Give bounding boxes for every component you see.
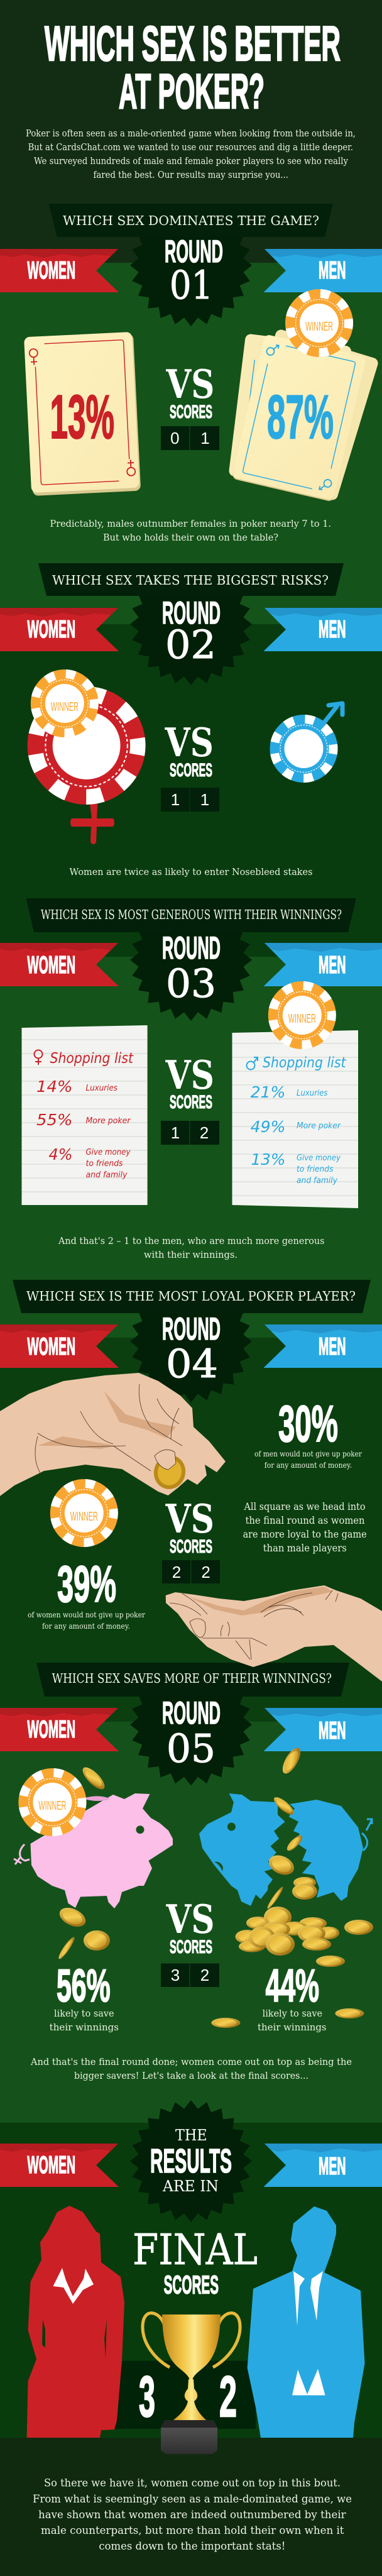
round 3 badge: 03 bbox=[166, 960, 216, 1006]
round 3 men banner bbox=[264, 943, 382, 986]
men shopping list: 49% bbox=[251, 1118, 285, 1136]
closing text: male counterparts, but more than hold their own when it bbox=[41, 2524, 344, 2536]
men stat 44%: 44% bbox=[266, 1961, 319, 2012]
women shopping list: and family bbox=[85, 1170, 128, 1180]
women stat 56%: their winnings bbox=[50, 2023, 119, 2033]
trophy bbox=[143, 2313, 240, 2454]
winner chip round 1: WINNER bbox=[305, 320, 333, 334]
intro text: fared the best. Our results may surprise you... bbox=[93, 170, 288, 180]
round 4 badge: 04 bbox=[166, 1341, 218, 1387]
women stat 39%: of women would not give up poker bbox=[28, 1610, 145, 1619]
round 4 commentary: the final round as women bbox=[245, 1515, 365, 1526]
men stat 30%: for any amount of money. bbox=[265, 1460, 352, 1470]
results women banner bbox=[0, 2144, 119, 2187]
women card 13% bbox=[24, 332, 141, 496]
winner chip round 2 bbox=[31, 669, 99, 737]
intro text: But at CardsChat.com we wanted to use our resources and dig a little deeper. bbox=[28, 143, 353, 153]
round 2 badge: 02 bbox=[165, 622, 216, 668]
round 3 women banner: WOMEN bbox=[27, 952, 75, 979]
round 4 question ribbon: WHICH SEX IS THE MOST LOYAL POKER PLAYER? bbox=[26, 1289, 356, 1304]
round 1 versus scoreboard: 1 bbox=[200, 429, 210, 448]
round 5 caption: And that's the final round done; women come out on top as being the bbox=[30, 2057, 352, 2067]
results men banner: MEN bbox=[319, 2153, 346, 2180]
round 4 commentary: All square as we head into bbox=[244, 1501, 366, 1512]
results badge: RESULTS bbox=[150, 2142, 232, 2180]
round 4 versus scoreboard bbox=[162, 1495, 220, 1583]
round 3 caption: with their winnings. bbox=[144, 1250, 237, 1260]
round 4 versus scoreboard: 2 bbox=[172, 1563, 181, 1582]
men shopping list: 21% bbox=[251, 1083, 285, 1101]
round 5 question ribbon bbox=[36, 1663, 349, 1697]
round 3 section bbox=[0, 898, 382, 1260]
men shopping list: More poker bbox=[297, 1121, 341, 1131]
round 4 commentary: are more loyal to the game bbox=[243, 1529, 367, 1540]
woman silhouette bbox=[27, 2206, 124, 2438]
women shopping list: 14% bbox=[36, 1077, 73, 1096]
round 2 section bbox=[0, 563, 382, 878]
round 1 women banner bbox=[0, 249, 119, 292]
round 3 versus scoreboard: 2 bbox=[200, 1123, 209, 1142]
round 3 versus scoreboard: 1 bbox=[171, 1123, 180, 1142]
round 4 section bbox=[0, 1280, 382, 1631]
round 1 question ribbon bbox=[49, 204, 333, 237]
women shopping list: to friends bbox=[85, 1159, 123, 1169]
winner chip round 5 bbox=[18, 1768, 86, 1836]
round 4 versus scoreboard: SCORES bbox=[170, 1536, 212, 1557]
round 5 badge: ROUND bbox=[162, 1695, 221, 1731]
women stat 56%: likely to save bbox=[54, 2009, 114, 2019]
round 4 badge: ROUND bbox=[162, 1311, 221, 1346]
men shopping list: Luxuries bbox=[297, 1088, 328, 1098]
round 1 versus scoreboard: SCORES bbox=[170, 402, 212, 422]
men stat 30%: 30% bbox=[278, 1395, 338, 1453]
intro text: We surveyed hundreds of male and female poker players to see who really bbox=[34, 157, 349, 167]
round 2 versus scoreboard bbox=[161, 719, 219, 812]
red chip female symbol bbox=[28, 686, 146, 844]
round 5 badge bbox=[130, 1663, 252, 1785]
women shopping list: More poker bbox=[85, 1116, 131, 1126]
results women banner: WOMEN bbox=[27, 2152, 75, 2179]
winner chip round 4: WINNER bbox=[70, 1510, 98, 1524]
round 2 versus scoreboard: VS bbox=[165, 719, 214, 766]
round 5 versus scoreboard: 3 bbox=[171, 1966, 180, 1984]
women stat 39% bbox=[28, 1556, 145, 1631]
men shopping list bbox=[232, 1030, 358, 1208]
round 3 versus scoreboard: VS bbox=[165, 1052, 214, 1098]
round 2 women banner: WOMEN bbox=[27, 616, 75, 643]
men stat 44%: likely to save bbox=[263, 2009, 322, 2019]
women shopping list: Luxuries bbox=[85, 1083, 117, 1093]
round 4 women banner: WOMEN bbox=[27, 1333, 75, 1360]
round 1 badge: ROUND bbox=[165, 234, 223, 269]
winner chip round 3 bbox=[268, 981, 336, 1049]
round 4 question ribbon bbox=[13, 1280, 371, 1313]
round 1 men banner bbox=[264, 249, 382, 292]
men shopping list: to friends bbox=[297, 1164, 333, 1174]
round 5 women banner bbox=[0, 1708, 119, 1751]
round 2 versus scoreboard: 1 bbox=[200, 790, 209, 809]
round 5 question ribbon: WHICH SEX SAVES MORE OF THEIR WINNINGS? bbox=[52, 1671, 332, 1686]
women stat 56%: 56% bbox=[57, 1961, 111, 2012]
men shopping list: Shopping list bbox=[263, 1055, 346, 1071]
blue chip male symbol bbox=[270, 703, 342, 783]
winner chip round 2: WINNER bbox=[51, 700, 79, 714]
closing text: So there we have it, women come out on top in this bout. bbox=[44, 2477, 341, 2489]
closing text: From what is seemingly seen as a male-dominated game, we bbox=[33, 2493, 352, 2505]
results badge bbox=[130, 2100, 252, 2222]
women shopping list: 55% bbox=[36, 1111, 73, 1129]
round 3 versus scoreboard: SCORES bbox=[170, 1092, 212, 1113]
round 4 commentary bbox=[243, 1501, 367, 1554]
men stat 44% bbox=[258, 1961, 327, 2033]
men stat 30%: of men would not give up poker bbox=[254, 1449, 362, 1458]
round 1 caption: But who holds their own on the table? bbox=[103, 533, 278, 543]
round 5 caption: bigger savers! Let's take a look at the final scores... bbox=[74, 2071, 308, 2081]
man silhouette bbox=[248, 2206, 364, 2438]
broken blue piggy bank with coins bbox=[199, 1745, 373, 2028]
winner chip round 4 bbox=[50, 1479, 118, 1547]
final score men: 2 bbox=[219, 2365, 237, 2429]
round 3 badge bbox=[130, 899, 252, 1021]
round 4 versus scoreboard: VS bbox=[165, 1495, 214, 1542]
pink piggy bank bbox=[14, 1764, 173, 1961]
round 5 versus scoreboard: 2 bbox=[200, 1966, 209, 1984]
round 1 badge bbox=[130, 204, 252, 326]
final scores heading: SCORES bbox=[164, 2271, 219, 2299]
round 2 versus scoreboard: 1 bbox=[171, 790, 180, 809]
women shopping list: Give money bbox=[85, 1147, 131, 1157]
winner chip round 5: WINNER bbox=[38, 1799, 66, 1813]
round 2 caption: Women are twice as likely to enter Nosebleed stakes bbox=[69, 867, 313, 878]
women stat 39%: 39% bbox=[57, 1556, 116, 1613]
round 1 question ribbon: WHICH SEX DOMINATES THE GAME? bbox=[63, 213, 319, 228]
round 5 men banner: MEN bbox=[319, 1717, 346, 1744]
round 4 versus scoreboard: 2 bbox=[201, 1563, 210, 1582]
round 1 badge: 01 bbox=[170, 262, 213, 308]
men shopping list: 13% bbox=[251, 1150, 285, 1169]
round 3 question ribbon bbox=[26, 898, 356, 932]
final scores heading: FINAL bbox=[133, 2225, 258, 2274]
men shopping list: and family bbox=[297, 1175, 338, 1186]
round 5 women banner: WOMEN bbox=[27, 1716, 75, 1743]
round 3 caption bbox=[58, 1236, 325, 1260]
closing text: have shown that women are indeed outnumbered by their bbox=[38, 2509, 346, 2521]
round 1 versus scoreboard bbox=[161, 361, 219, 450]
round 4 men banner: MEN bbox=[319, 1333, 346, 1360]
round 5 versus scoreboard bbox=[161, 1896, 219, 1987]
winner chip round 3: WINNER bbox=[288, 1012, 316, 1026]
round 5 versus scoreboard: SCORES bbox=[170, 1937, 212, 1957]
closing text bbox=[33, 2477, 352, 2552]
round 2 badge bbox=[130, 563, 252, 685]
round 1 men banner: MEN bbox=[319, 257, 346, 284]
results section bbox=[0, 2100, 382, 2454]
round 2 women banner bbox=[0, 608, 119, 651]
score band bbox=[101, 2361, 256, 2429]
results badge: ARE IN bbox=[162, 2177, 219, 2195]
round 1 section bbox=[0, 204, 382, 543]
round 1 versus scoreboard: VS bbox=[166, 361, 214, 407]
lower cupped hand bbox=[166, 1585, 382, 1682]
upper hand holding coin bbox=[0, 1373, 226, 1496]
women shopping list bbox=[21, 1025, 148, 1205]
round 5 caption bbox=[30, 2057, 352, 2081]
round 2 badge: ROUND bbox=[162, 595, 221, 630]
women card 13%: 13% bbox=[50, 382, 114, 451]
round 2 men banner bbox=[264, 608, 382, 651]
round 3 versus scoreboard bbox=[161, 1052, 219, 1145]
final scores heading bbox=[133, 2225, 258, 2299]
round 2 question ribbon: WHICH SEX TAKES THE BIGGEST RISKS? bbox=[52, 573, 329, 588]
round 5 versus scoreboard: VS bbox=[166, 1896, 215, 1942]
round 4 men banner bbox=[264, 1324, 382, 1368]
round 1 versus scoreboard: 0 bbox=[170, 429, 180, 448]
round 3 women banner bbox=[0, 943, 119, 986]
winner chip round 1 bbox=[285, 289, 353, 357]
intro text: Poker is often seen as a male-oriented game when looking from the outside in, bbox=[26, 129, 356, 139]
men stat 44%: their winnings bbox=[258, 2023, 327, 2033]
women stat 56% bbox=[50, 1961, 119, 2033]
round 4 women banner bbox=[0, 1324, 119, 1368]
round 1 caption: Predictably, males outnumber females in poker nearly 7 to 1. bbox=[50, 519, 331, 529]
round 3 caption: And that's 2 – 1 to the men, who are much more generous bbox=[58, 1236, 325, 1247]
women shopping list: Shopping list bbox=[50, 1050, 134, 1067]
round 2 versus scoreboard: SCORES bbox=[170, 760, 212, 781]
round 5 badge: 05 bbox=[166, 1726, 216, 1771]
men cards 87% bbox=[228, 328, 379, 502]
women shopping list: 4% bbox=[49, 1145, 73, 1164]
women stat 39%: for any amount of money. bbox=[42, 1621, 130, 1631]
round 3 badge: ROUND bbox=[162, 930, 221, 966]
round 4 badge bbox=[130, 1280, 252, 1402]
round 1 women banner: WOMEN bbox=[27, 257, 75, 284]
round 3 men banner: MEN bbox=[319, 952, 346, 979]
round 5 section bbox=[0, 1585, 382, 2081]
final score women: 3 bbox=[139, 2365, 155, 2429]
round 2 men banner: MEN bbox=[319, 616, 346, 643]
intro text bbox=[26, 129, 356, 180]
closing text: comes down to the important stats! bbox=[99, 2540, 285, 2552]
men stat 30% bbox=[254, 1395, 362, 1470]
men shopping list: Give money bbox=[297, 1153, 341, 1163]
results badge: THE bbox=[175, 2127, 207, 2144]
round 2 question ribbon bbox=[38, 563, 344, 596]
round 1 caption bbox=[50, 519, 331, 543]
results men banner bbox=[264, 2144, 382, 2187]
round 5 men banner bbox=[264, 1708, 382, 1751]
title bbox=[45, 16, 341, 119]
round 4 commentary: than male players bbox=[263, 1543, 347, 1554]
